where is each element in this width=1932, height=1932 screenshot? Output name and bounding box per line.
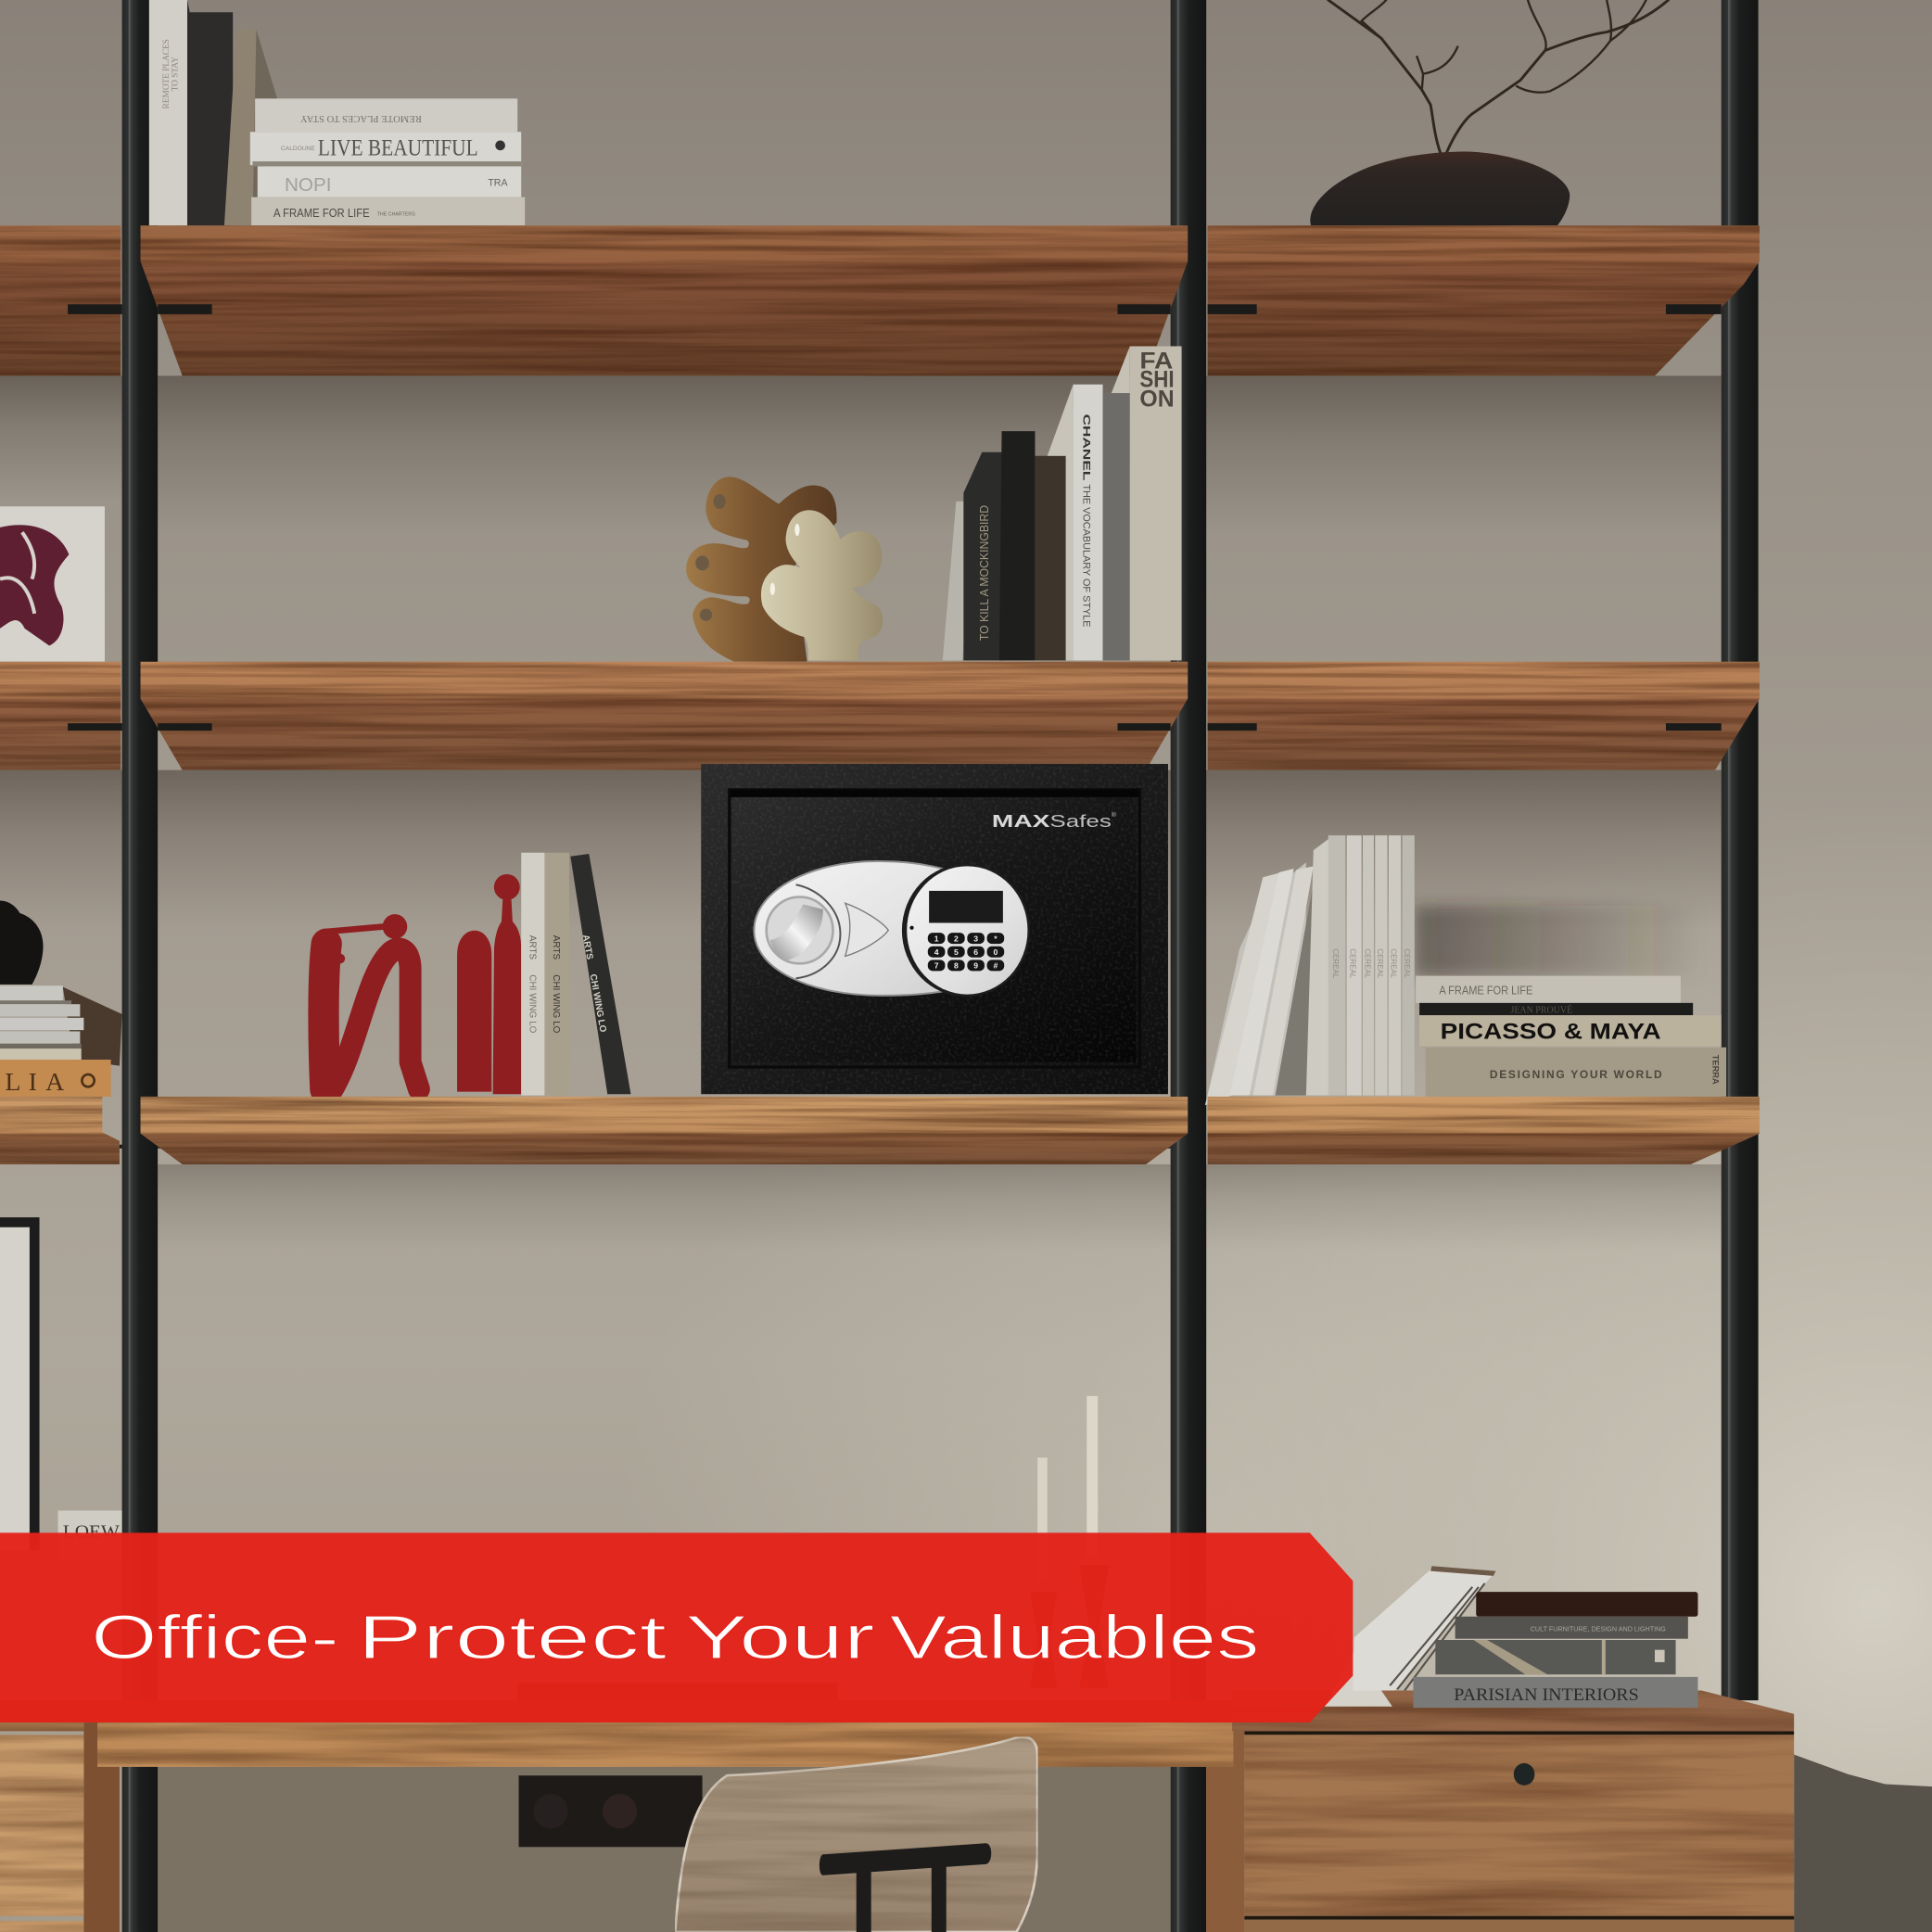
keypad [928,933,1004,971]
display [929,891,1003,922]
upright white books: CEREAL [1403,948,1411,979]
book: fashion: FA [1139,348,1173,374]
book: light leaning [943,502,974,660]
book: remote places [149,0,187,225]
left drawers [0,1722,83,1932]
book: loew: LOEW [63,1522,120,1543]
book: tan leaning [224,30,277,225]
items on lower shelf left [0,835,1726,1105]
keypad: 6 [973,947,978,957]
title: Your [685,1604,875,1672]
keypad: 3 [973,934,978,943]
sculpture [686,477,883,662]
stacked books: I [29,1068,37,1097]
keypad: 7 [934,961,939,971]
arts books [521,853,630,1096]
book stack: THE CHARTERS [377,212,415,218]
desk legs [83,1722,1244,1932]
horizontal books stack: A FRAME FOR LIFE [1439,984,1532,998]
safe body [701,764,1168,1094]
book: fashion: SHI [1139,366,1175,392]
brand logo: ® [1112,811,1116,819]
horizontal books stack: PICASSO & MAYA [1441,1019,1661,1044]
cabinet and desk [0,1691,1794,1932]
book: fashion: ON [1139,387,1175,413]
desk top [97,1722,1233,1767]
book: grey stripe [1435,1640,1676,1674]
arts books: CHI WING LO [551,974,561,1034]
title: Office- [91,1604,338,1672]
book: chanel [1048,385,1103,660]
stacked books: L [5,1068,20,1097]
keypad: 1 [934,934,939,943]
book: grey pages [1103,393,1130,660]
arts books: CHI WING LO [527,974,538,1034]
arrow emboss [845,903,888,956]
keypad: 5 [954,947,959,957]
book: chanel: CHANEL [1080,414,1091,481]
book: chanel: THE VOCABULARY OF STYLE [1080,484,1091,628]
candles [1030,1396,1109,1688]
arts books: CHI WING LO [588,973,608,1034]
red title banner [0,1532,1353,1722]
safe door [730,790,1139,1067]
book: loew [57,1510,122,1560]
horizontal books stack: DESIGNING YOUR WORLD [1490,1068,1665,1081]
shelf row 2 [0,662,1760,770]
book: parisian interiors: PARISIAN INTERIORS [1454,1685,1639,1705]
brand logo [992,811,1116,831]
lower wall items left [0,1217,122,1560]
keypad: 4 [934,947,939,957]
book stack: TRA [488,178,508,189]
rotary handle [767,884,840,978]
dark object [0,901,44,985]
shelf row 1 [0,225,1760,375]
horizontal books stack: TERRA [1710,1055,1720,1085]
book: brown leather [1476,1592,1697,1617]
items on top shelf [149,0,525,225]
keypad: 9 [973,961,978,971]
red sculpture figure one [324,918,419,1089]
stacked books [0,985,122,1097]
horizontal books stack [1416,976,1726,1097]
safe [701,764,1168,1094]
book: parisian interiors [1413,1677,1697,1708]
books on middle shelf [0,346,1182,662]
lock plate [754,861,1030,997]
red sculpture figure two [465,874,521,1094]
upright white books [1205,835,1415,1105]
book stack: CALDOUNE [281,146,315,152]
keypad: 0 [993,947,998,957]
upright white books: CEREAL [1331,948,1340,979]
cabinet top [1232,1691,1794,1731]
book: to kill a mockingbird [963,452,1004,660]
book stack: REMOTE PLACES TO STAY [300,113,422,123]
horizontal books stack: JEAN PROUVÉ [1510,1005,1572,1016]
wall socket [519,1775,703,1847]
title: Valuables [890,1604,1259,1672]
book: black spine [999,431,1035,660]
keypad disc [902,864,1030,997]
vase with branches [1310,0,1669,225]
book: to kill a mockingbird: TO KILL A MOCKINGBIRD [978,505,991,641]
book: remote places: TO STAY [171,57,180,91]
keypad: # [993,961,998,971]
arts books: ARTS [580,934,594,960]
book stack [250,98,525,225]
open book [1325,1566,1496,1707]
upright white books: CEREAL [1376,948,1384,979]
chair [675,1737,1037,1932]
brand logo: Safes [1049,811,1112,831]
desk books [1325,1566,1697,1708]
book stack: LIVE BEAUTIFUL [318,134,478,160]
upright white books: CEREAL [1390,948,1398,979]
book: remote places: REMOTE PLACES [162,39,172,108]
book: dark spine [187,0,233,225]
shelf brackets [68,304,1722,1149]
wall shadow beside cabinet [1794,1755,1932,1932]
keypad: 2 [954,934,959,943]
desk surface items under banner [0,1684,1306,1722]
book: fashion [1112,346,1182,660]
book: brown spine [1035,456,1066,660]
chair handle [820,1843,991,1932]
book: cult furniture [1455,1617,1688,1639]
arts books: ARTS [551,935,561,960]
shelf row 3 [0,1097,1760,1164]
drawer knob [1514,1763,1534,1786]
upright white books: CEREAL [1364,948,1372,979]
book: cult furniture: CULT FURNITURE, DESIGN AND LIGHTING [1531,1625,1666,1633]
stacked books: A [45,1068,64,1097]
keypad: * [994,934,998,943]
book stack: A FRAME FOR LIFE [273,206,370,220]
upright white books: CEREAL [1349,948,1357,979]
brand logo: MAX [992,811,1050,831]
picture frame [0,1217,40,1550]
arts books: ARTS [527,935,538,960]
drawer [1244,1731,1794,1932]
art print [0,506,105,662]
book stack: NOPI [285,175,332,196]
title: Protect [357,1604,667,1672]
keypad: 8 [954,961,959,971]
